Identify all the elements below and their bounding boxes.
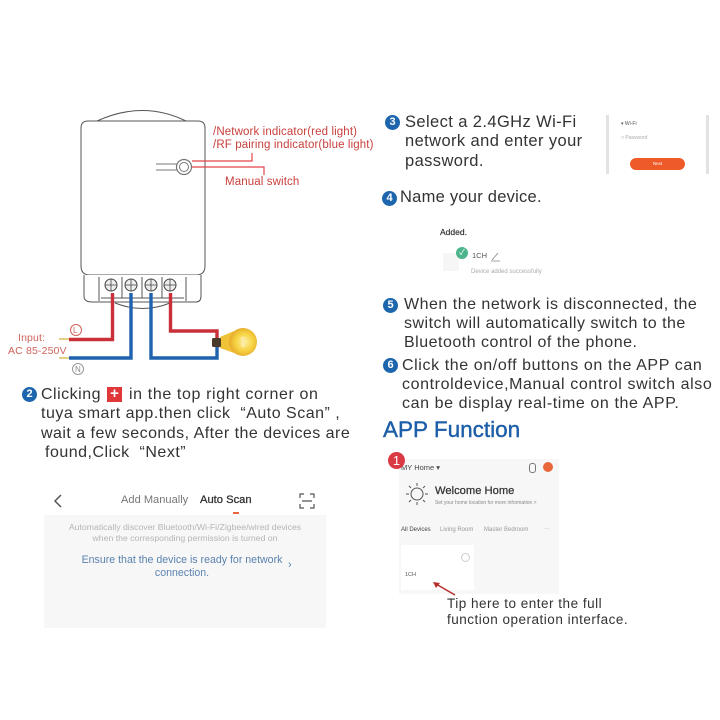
L and N symbols [70,324,84,374]
L and N symbols: L [73,326,78,335]
step 1 red badge [388,452,405,469]
device placeholder [443,253,459,271]
light bulb [212,328,257,356]
device name: 1CH [472,251,487,260]
tab add manually: Add Manually [121,494,188,506]
next button: Next [653,161,662,166]
callout labels: /RF pairing indicator(blue light) [213,139,374,151]
step 5: Bluetooth control of the phone. [404,334,637,351]
home title: MY Home ▾ [401,463,440,472]
step 2 text [22,385,350,460]
plus icon [107,387,122,402]
step 5 [383,296,697,351]
step 4 badge [382,191,397,206]
device card [401,545,474,590]
scan link [82,554,282,578]
step 6 badge: 6 [387,359,394,371]
pointer arrow [433,582,456,596]
added heading: Added. [440,227,467,237]
tab auto scan: Auto Scan [200,494,252,506]
device card label: 1CH [405,572,416,578]
input label: Input: [18,332,45,344]
chevron: › [288,559,292,571]
step 6 badge [383,358,398,373]
step 2 text: wait a few seconds, After the devices are [41,424,350,442]
app function heading: APP Function [383,417,520,442]
wifi row: ▾ Wi-Fi [621,121,637,127]
step 3 [385,113,583,170]
panel: app home screenshot: Master Bedroom [484,527,528,533]
step 6 [383,357,712,412]
callout labels: /Network indicator(red light) [213,126,357,138]
room tabs: All Devices [401,527,431,533]
panel: wifi screenshot [606,115,709,174]
plus icon: + [110,385,119,402]
step 6: can be display real-time on the APP. [402,395,679,412]
step 5 badge [383,298,398,313]
step 5 badge: 5 [387,299,394,311]
welcome subtitle: Set your home location for more information > [435,500,537,506]
input label: AC 85-250V [8,345,67,357]
edit icon [491,252,500,262]
power icon [461,553,470,562]
input label [8,332,67,357]
panel: app home screenshot: Living Room [440,527,473,533]
step 3 badge: 3 [389,116,396,128]
callout labels: Manual switch [225,176,299,188]
step 2 text: Clicking [41,386,101,403]
tab underline [233,512,239,514]
step 4 badge: 4 [386,192,393,204]
step 2 badge [22,387,37,402]
step 4: Name your device. [400,188,542,206]
scan link: connection. [155,566,209,578]
step 3 badge [385,115,400,130]
step 6: controldevice,Manual control switch also [402,376,712,393]
step 2 text: tuya smart app.then click “Auto Scan” , [41,405,340,422]
step 5: switch will automatically switch to the [404,315,686,332]
welcome heading: Welcome Home [435,485,514,497]
tip text: function operation interface. [447,612,628,627]
password row: □ Password [621,135,647,141]
step 2 text: found,Click “Next” [45,444,186,460]
step 1 red badge: 1 [393,453,400,468]
check icon [456,247,468,259]
step 3: Select a 2.4GHz Wi-Fi [405,113,577,131]
scan content [44,515,326,628]
scan icon [299,493,315,509]
next button [630,158,685,170]
scan hint [69,522,301,542]
added screenshot [440,227,542,275]
added message: Device added successfully [471,269,542,275]
step 2 text: in the top right corner on [129,386,319,403]
scan link: Ensure that the device is ready for network [82,554,282,566]
step 2 badge: 2 [26,388,33,400]
step 3: network and enter your [405,132,583,150]
manual switch button [156,160,192,174]
mic icon [529,463,536,473]
callout lines [192,153,264,175]
check icon: ✓ [459,248,465,257]
scan hint: Automatically discover Bluetooth/Wi-Fi/Zigbee/wired devices [69,522,301,532]
step 3: password. [405,152,484,170]
panel: auto scan screenshot [54,493,315,578]
step 6: Click the on/off buttons on the APP can [402,357,702,374]
wires [69,293,217,358]
panel: app home screenshot [399,459,559,594]
back arrow [54,494,62,508]
step 5: When the network is disconnected, the [404,296,697,313]
wire ends [59,339,69,358]
add icon [543,462,553,472]
terminal screws [105,279,176,291]
panel: app home screenshot: ··· [544,526,550,532]
sun icon [406,483,428,505]
tip text [447,596,628,627]
device body [81,110,205,308]
L and N symbols: N [75,365,81,374]
tip text: Tip here to enter the full [447,596,602,610]
scan hint: when the corresponding permission is turned on [93,532,277,542]
callout labels [213,126,374,188]
